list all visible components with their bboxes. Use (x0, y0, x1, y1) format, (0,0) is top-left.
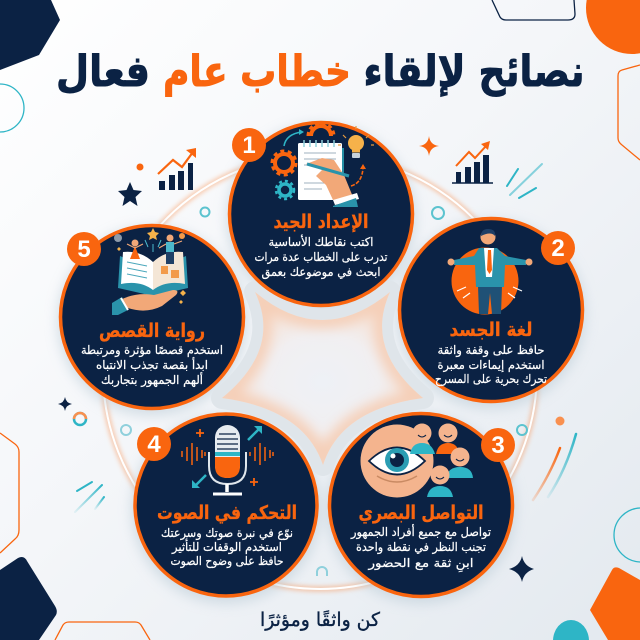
icon: notepad, hand and gears (272, 123, 374, 207)
small decorations (58, 136, 576, 582)
title (56, 47, 584, 97)
heading: التواصل البصري (358, 502, 484, 525)
footer tagline: كن واثقًا ومؤثرًا (260, 609, 381, 631)
icon: open book on hand (112, 228, 188, 315)
text block: تواصل مع جميع أفراد الجمهور (350, 524, 491, 540)
number badge 3 (481, 428, 515, 462)
text block (81, 343, 223, 388)
text block (161, 526, 293, 569)
text block: استخدم إيماءات معبرة (438, 358, 544, 373)
number badge 1: 1 (242, 132, 256, 159)
text block (254, 234, 388, 280)
text block: حافظ على وقفة واثقة (438, 343, 544, 358)
panel: 2 body language (400, 218, 582, 402)
text block: استخدم قصصًا مؤثرة ومرتبطة (81, 343, 223, 358)
number badge 4 (137, 427, 171, 461)
decorative ring behind circles (103, 155, 537, 589)
heading: التحكم في الصوت (157, 502, 297, 524)
number badge 5 (67, 232, 101, 266)
text block: ألهم الجمهور بتجاربك (101, 372, 203, 388)
number badge 2: 2 (551, 235, 565, 262)
panel: 4 voice control (135, 414, 317, 596)
text block: تحرك بحرية على المسرح (435, 372, 547, 387)
heading: لغة الجسد (450, 319, 532, 341)
icon: eye and audience (360, 424, 473, 498)
text block: حافظ على وضوح الصوت (170, 554, 284, 569)
text block: ابنِ ثقة مع الحضور (367, 556, 474, 573)
text block: ابحث في موضوعك بعمق (262, 265, 380, 280)
text block: تدرب على الخطاب عدة مرات (254, 250, 388, 265)
number badge 4: 4 (147, 431, 161, 458)
panel: 1 preparation (230, 122, 412, 306)
text block (435, 343, 547, 387)
icon: microphone (182, 425, 273, 494)
number badge 2 (541, 231, 575, 265)
text block: نوّع في نبرة صوتك وسرعتك (161, 526, 293, 541)
left chart icon (158, 148, 196, 190)
central star shape (222, 292, 423, 465)
circle shadows (57, 123, 586, 604)
title: فعال (56, 47, 150, 97)
text block (350, 524, 491, 573)
text block: تجنب النظر في نقطة واحدة (356, 540, 486, 555)
title: خطاب عام (163, 47, 351, 97)
number badge 1 (232, 128, 266, 162)
audience faces (410, 424, 473, 497)
heading: الإعداد الجيد (274, 211, 368, 233)
text block: ابدأ بقصة تجذب الانتباه (96, 357, 208, 372)
text block: استخدم الوقفات للتأثير (171, 538, 282, 555)
title: نصائح لإلقاء (364, 47, 584, 97)
number badge 3: 3 (491, 432, 505, 459)
number badge 5: 5 (77, 236, 91, 263)
right chart icon (452, 141, 493, 183)
figures (127, 234, 182, 264)
panel: 5 storytelling (60, 226, 244, 408)
text block: اكتب نقاطك الأساسية (268, 234, 374, 249)
icon: presenter (448, 229, 532, 314)
panel: 3 eye contact (330, 414, 515, 596)
heading: رواية القصص (99, 320, 205, 342)
